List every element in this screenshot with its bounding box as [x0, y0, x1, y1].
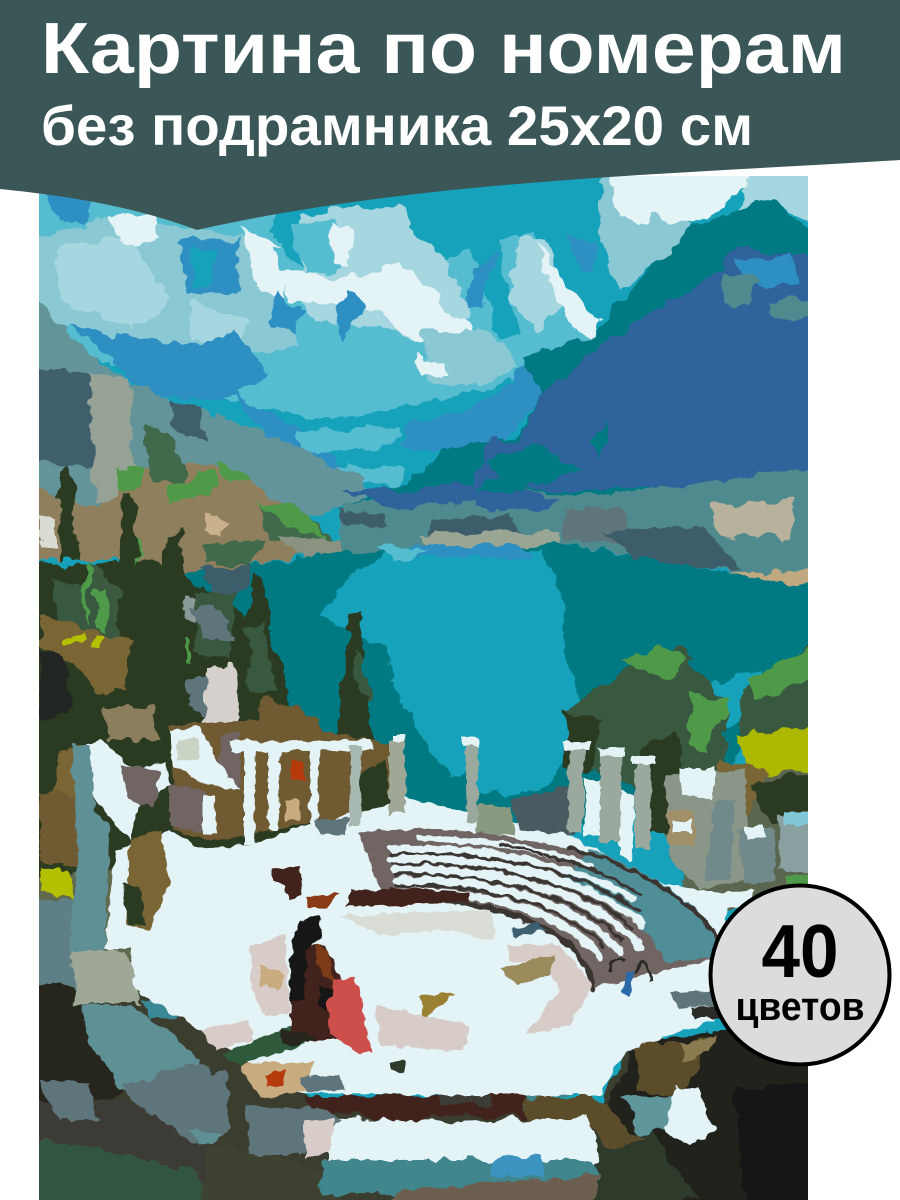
- title: Картина по номерам: [41, 9, 846, 89]
- foreground left: [39, 898, 632, 1200]
- seating rows: [272, 830, 728, 1018]
- badge number: 40: [762, 909, 838, 993]
- forest left: [39, 466, 374, 960]
- painting: mountain lake with ancient amphitheatre: [20, 170, 830, 1200]
- left hills: [39, 302, 367, 574]
- foreground centre ledge: [304, 1093, 647, 1200]
- header banner: [0, 0, 900, 230]
- far shore: [338, 468, 808, 587]
- white stage floor: [105, 795, 740, 1095]
- floor patches: [200, 910, 592, 1160]
- subtitle: без подрамника 25х20 см: [41, 94, 753, 157]
- lake: [145, 545, 830, 830]
- foreground right: [593, 1030, 808, 1200]
- badge label: цветов: [736, 985, 864, 1029]
- ruined colonnade left: [68, 720, 405, 950]
- sky and clouds: [20, 170, 830, 490]
- trees right: [562, 644, 808, 910]
- mountain right: [351, 199, 808, 504]
- badge: 40 colours: [710, 886, 890, 1064]
- seated woman figure: [222, 916, 372, 1065]
- ruined colonnade right: [463, 738, 830, 910]
